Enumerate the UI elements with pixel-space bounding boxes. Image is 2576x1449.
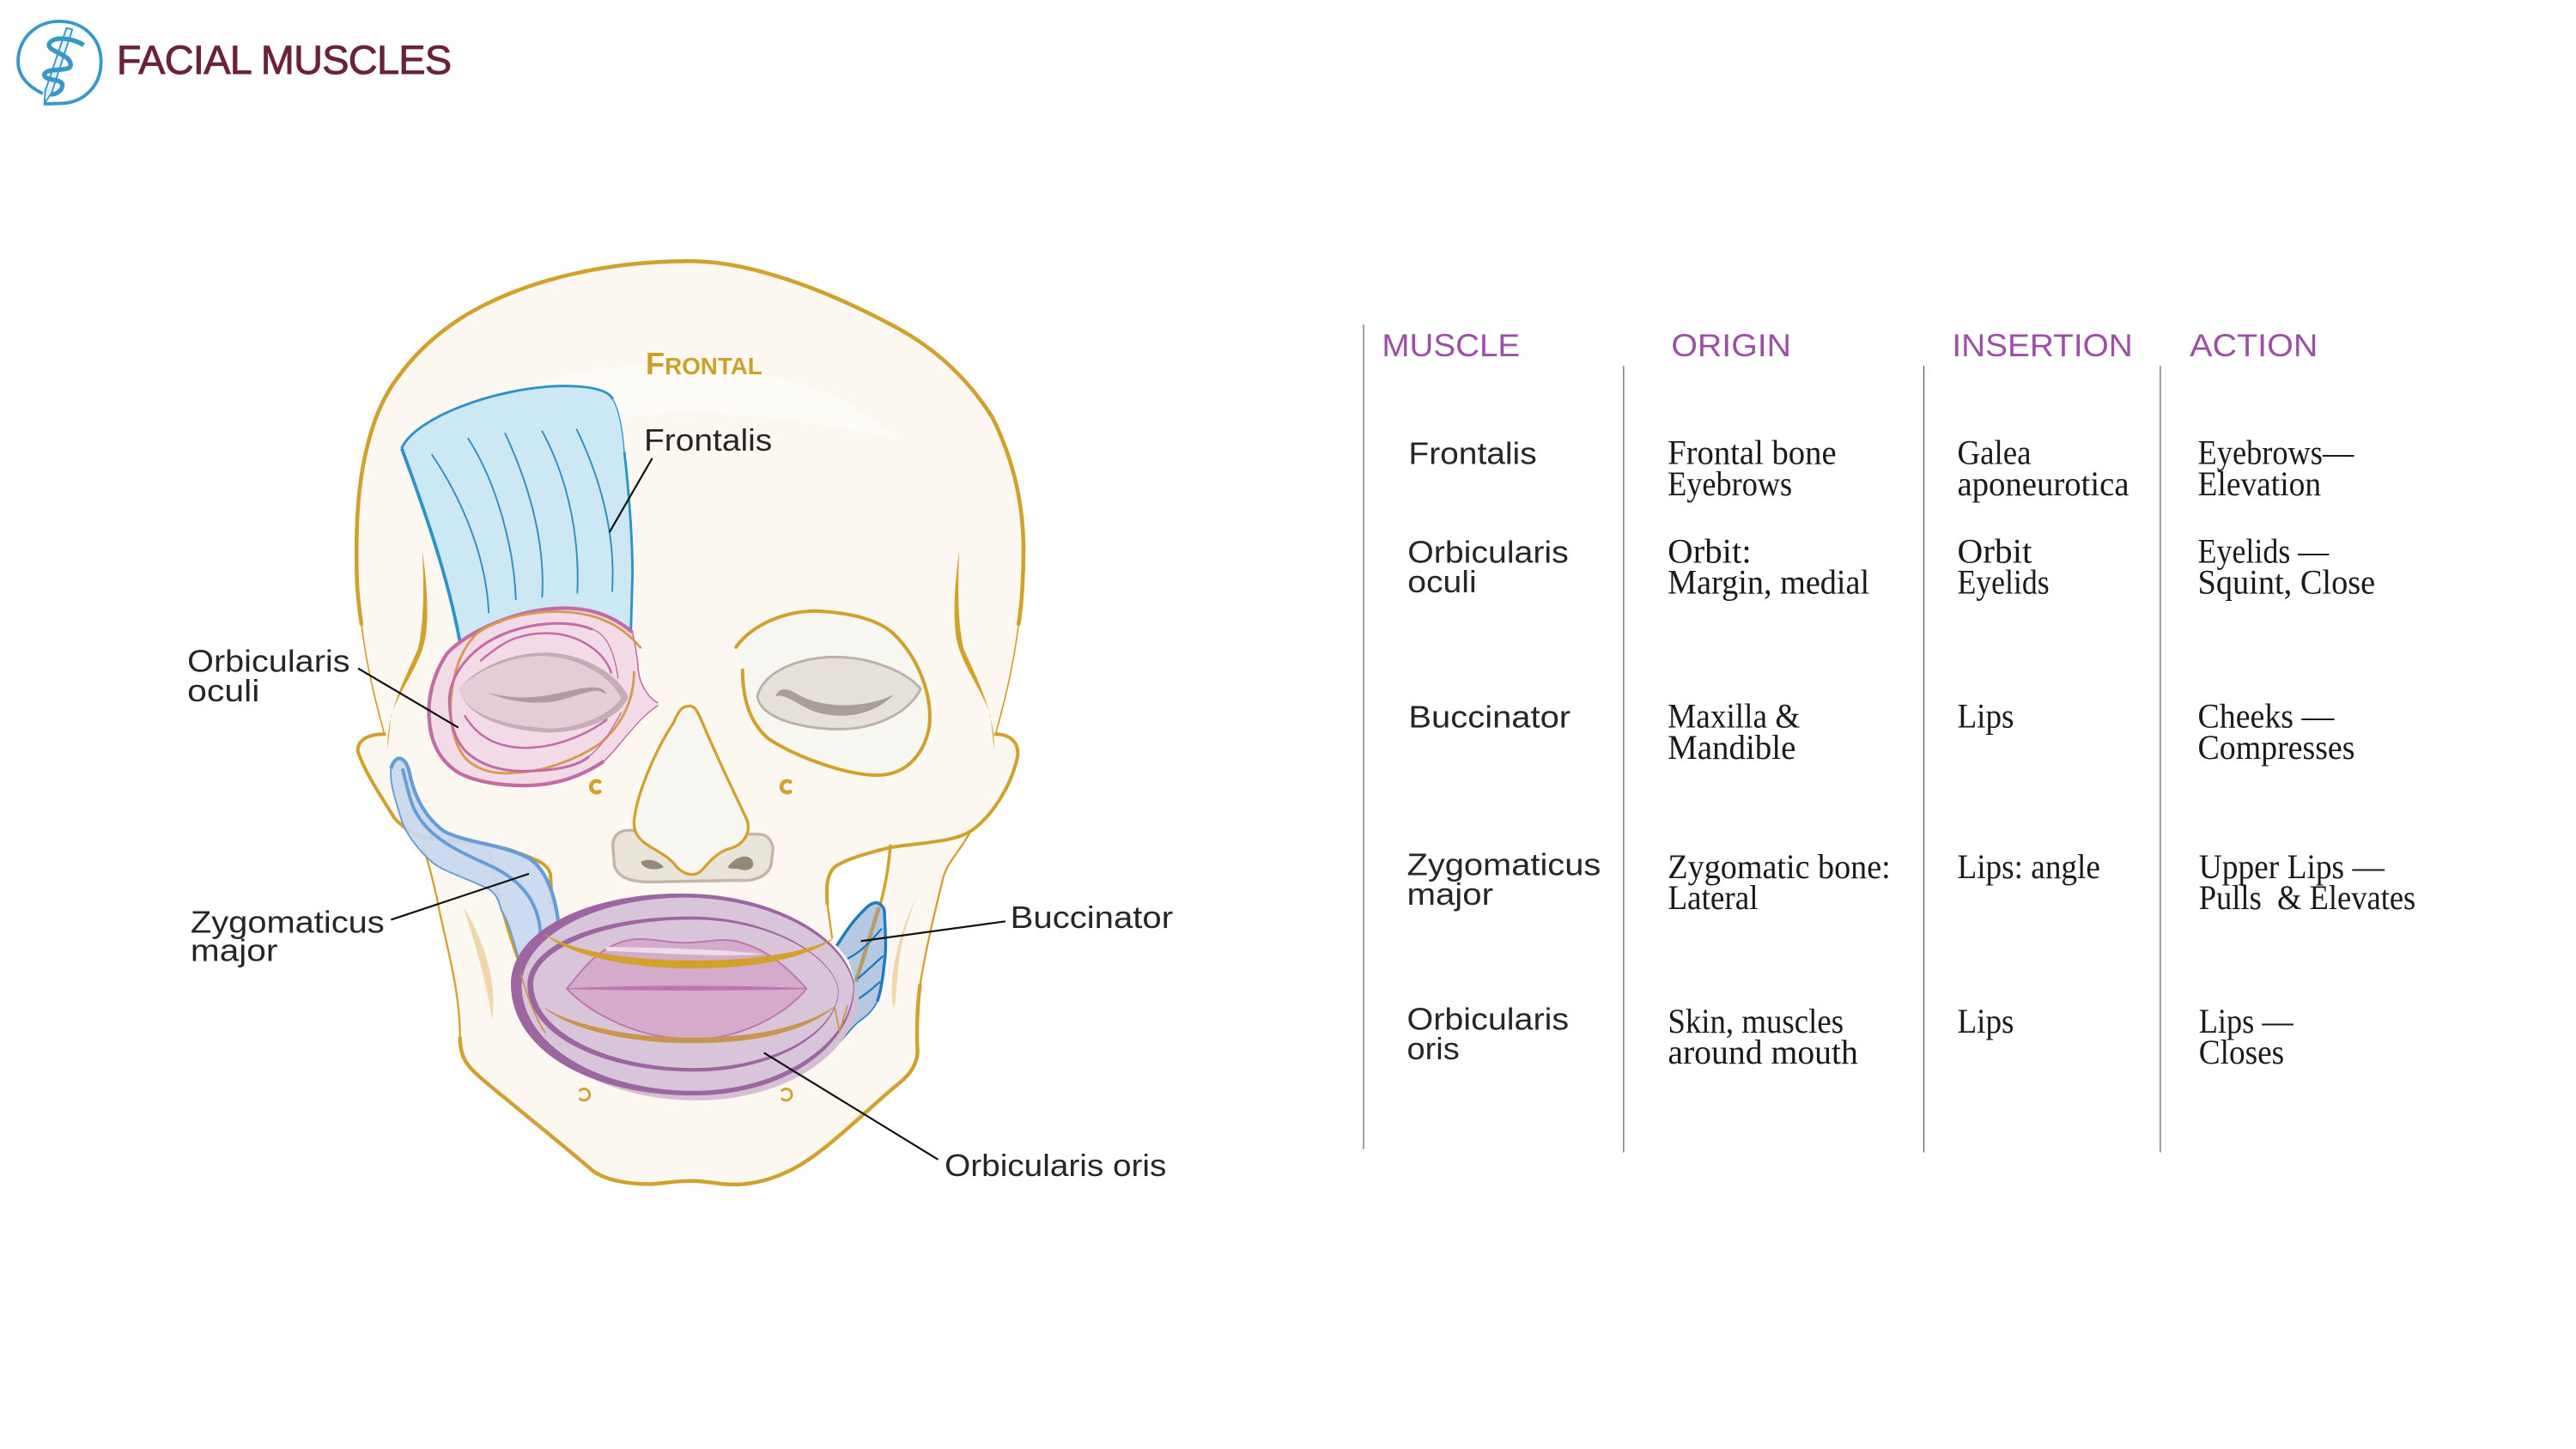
row: Zygomaticus major: Upper Lips — bbox=[2199, 847, 2385, 886]
row: Orbicularis oris: Lips bbox=[1957, 1002, 2014, 1040]
row: Orbicularis oris: Orbicularis bbox=[1407, 1002, 1569, 1037]
row: Zygomaticus major: Zygomaticus bbox=[1407, 846, 1601, 882]
row: Orbicularis oris: Closes bbox=[2199, 1033, 2284, 1071]
muscle: orbicularis oculi bbox=[428, 608, 659, 785]
row: Orbicularis oculi: Margin, medial bbox=[1668, 562, 1869, 601]
mandible arc bbox=[545, 1007, 835, 1043]
row: Buccinator: Cheeks — bbox=[2198, 697, 2335, 736]
row: Frontalis: Galea bbox=[1957, 433, 2032, 471]
outer ring bbox=[511, 894, 854, 1095]
muscle: frontalis bbox=[402, 386, 633, 657]
row: Zygomaticus major: major bbox=[1407, 876, 1493, 912]
right eye socket bbox=[736, 611, 930, 775]
row: Orbicularis oculi: Eyelids — bbox=[2198, 531, 2330, 570]
icon: caduceus pencil logo bbox=[18, 21, 101, 104]
row: Orbicularis oculi: Orbit: bbox=[1668, 531, 1752, 570]
maxilla arc bbox=[545, 935, 832, 968]
table headers: MUSCLE bbox=[1382, 327, 1520, 363]
header: logo and title bbox=[18, 21, 452, 104]
row: Zygomaticus major: Pulls & Elevates bbox=[2199, 878, 2415, 917]
skull outline bbox=[356, 261, 1024, 1185]
column dividers bbox=[1364, 324, 2160, 1152]
label: Buccinator: Buccinator bbox=[1011, 900, 1173, 935]
inner ring bbox=[527, 917, 839, 1071]
label: Orbicularis oculi bbox=[187, 644, 350, 708]
skull base shape bbox=[356, 261, 1024, 1185]
row: Orbicularis oculi: Squint, Close bbox=[2198, 562, 2375, 601]
muscle: zygomaticus major bbox=[391, 758, 559, 961]
closed eye bbox=[459, 652, 629, 732]
row: Orbicularis oculi: Orbicularis bbox=[1407, 534, 1569, 569]
pointer lines bbox=[358, 458, 1005, 1160]
buccinator fibres bbox=[848, 929, 884, 1003]
row: Orbicularis oris: Lips — bbox=[2199, 1002, 2293, 1040]
row: Frontalis: Eyebrows— bbox=[2198, 433, 2354, 471]
row: Zygomaticus major bbox=[1407, 846, 2415, 917]
nose bbox=[613, 706, 773, 882]
frontalis fibres bbox=[432, 429, 613, 613]
label: Orbicularis oculi: Orbicularis bbox=[187, 644, 350, 679]
row: Orbicularis oris: oris bbox=[1407, 1031, 1460, 1066]
row: Orbicularis oculi: Eyelids bbox=[1957, 562, 2050, 601]
row: Orbicularis oculi: oculi bbox=[1407, 564, 1477, 599]
bone label: frontal: FRONTAL bbox=[646, 346, 762, 381]
label: Orbicularis oculi: oculi bbox=[187, 673, 259, 708]
label: Zygomaticus major: Zygomaticus bbox=[191, 905, 385, 940]
orbital bone edge bbox=[451, 612, 641, 773]
row: Zygomaticus major: Zygomatic bone: bbox=[1668, 847, 1891, 886]
row: Zygomaticus major: Lateral bbox=[1668, 878, 1759, 917]
row: Orbicularis oculi: Orbit bbox=[1957, 531, 2032, 570]
label: Orbicularis oris: Orbicularis oris bbox=[945, 1148, 1166, 1183]
table headers: INSERTION bbox=[1952, 327, 2133, 363]
cheek marks bbox=[464, 895, 918, 1020]
label: Zygomaticus major: major bbox=[191, 932, 277, 967]
muscle table bbox=[1364, 324, 2415, 1152]
temporal lines bbox=[387, 550, 994, 749]
table headers: ACTION bbox=[2190, 327, 2318, 363]
row: Buccinator: Maxilla & bbox=[1668, 697, 1800, 736]
row: Buccinator: Compresses bbox=[2198, 728, 2354, 767]
lips bbox=[567, 939, 806, 1039]
row: Orbicularis oris: around mouth bbox=[1668, 1033, 1858, 1071]
row: Frontalis: Frontalis bbox=[1408, 435, 1537, 470]
label: Frontalis: Frontalis bbox=[644, 422, 772, 458]
row: Orbicularis oris bbox=[1407, 1002, 2293, 1071]
right closed eye bbox=[757, 657, 920, 729]
label: Zygomaticus major bbox=[191, 905, 385, 967]
row: Orbicularis oculi bbox=[1407, 531, 2375, 601]
table headers bbox=[1382, 327, 2318, 363]
row: Buccinator: Lips bbox=[1957, 697, 2014, 736]
muscle rings bbox=[449, 623, 621, 771]
muscle: buccinator bbox=[836, 903, 885, 1043]
row: Frontalis: Eyebrows bbox=[1668, 464, 1792, 503]
row: Frontalis: aponeurotica bbox=[1957, 464, 2129, 503]
row: Frontalis: Frontal bone bbox=[1668, 433, 1837, 471]
foramina bbox=[580, 781, 792, 1100]
row: Zygomaticus major: Lips: angle bbox=[1957, 847, 2100, 886]
title: FACIAL MUSCLES bbox=[117, 38, 452, 82]
table headers: ORIGIN bbox=[1671, 327, 1791, 363]
row: Buccinator: Mandible bbox=[1668, 728, 1795, 767]
row: Buccinator: Buccinator bbox=[1408, 700, 1571, 735]
row: Frontalis: Elevation bbox=[2198, 464, 2321, 503]
muscle: orbicularis oris bbox=[511, 894, 860, 1100]
row: Frontalis bbox=[1408, 433, 2354, 503]
row: Buccinator bbox=[1408, 697, 2354, 767]
row: Orbicularis oris: Skin, muscles bbox=[1668, 1002, 1844, 1040]
nostrils bbox=[641, 857, 753, 870]
skull diagram bbox=[187, 261, 1173, 1185]
